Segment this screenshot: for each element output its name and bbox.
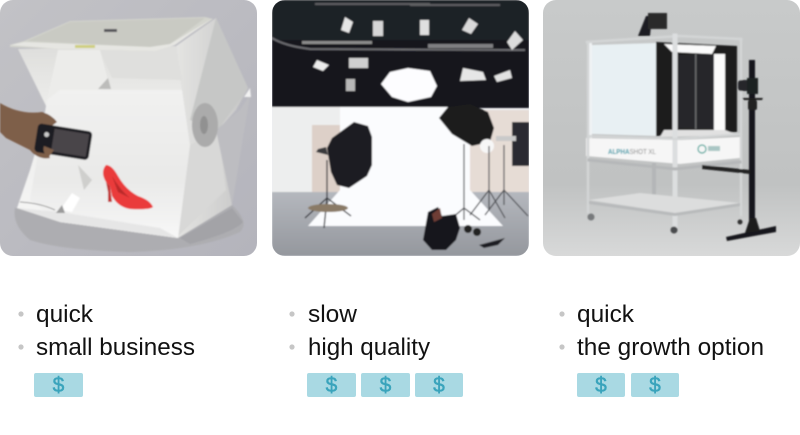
column 2 bullets: high quality	[308, 334, 430, 361]
column 3 bullets: quick	[577, 301, 635, 328]
shelf	[592, 193, 736, 212]
column 2 price: $	[380, 374, 392, 397]
column 3 bullets: the growth option	[577, 334, 764, 361]
octagon light	[381, 68, 437, 102]
dark interior	[656, 42, 737, 136]
column 2 bullets	[289, 301, 430, 361]
camera on top	[638, 16, 652, 36]
hand	[0, 103, 57, 158]
photo: foldable light box with red shoe	[0, 0, 257, 256]
right softbox	[439, 104, 494, 146]
column 2 bullets: slow	[308, 301, 358, 328]
column 3 price: $	[595, 374, 607, 397]
wheels	[588, 214, 594, 220]
column 1 price: $	[53, 374, 65, 397]
camera stand	[749, 60, 755, 230]
column 1 bullets	[18, 301, 195, 361]
led lamp	[62, 194, 80, 212]
floor	[272, 192, 529, 256]
interior	[16, 46, 182, 211]
brand label: ALPHASHOT XL	[608, 147, 656, 156]
left white panel	[592, 43, 656, 136]
phone	[34, 123, 93, 160]
aluminium frame	[587, 36, 741, 225]
walls	[272, 106, 341, 109]
column 2 price: $	[326, 374, 338, 397]
ceiling	[272, 38, 529, 110]
column 1 bullets: small business	[36, 334, 195, 361]
table	[15, 205, 244, 252]
photo: professional photo studio	[272, 0, 529, 256]
column 3 price	[577, 373, 679, 397]
photo: AlphaShot XL automated studio	[543, 0, 800, 256]
base band with logo	[586, 137, 740, 164]
red shoe	[103, 165, 153, 209]
column 2 price: $	[433, 374, 445, 397]
white backdrop	[308, 107, 503, 226]
camera bag	[423, 207, 460, 250]
column 3 bullets	[559, 301, 764, 361]
column 2 price	[307, 373, 463, 397]
column 3 price: $	[649, 374, 661, 397]
column 1 price	[34, 373, 83, 397]
lamps	[341, 17, 353, 33]
lid	[10, 17, 213, 51]
column 1 bullets: quick	[36, 301, 94, 328]
left softbox	[327, 122, 372, 188]
right side folds	[176, 18, 248, 238]
